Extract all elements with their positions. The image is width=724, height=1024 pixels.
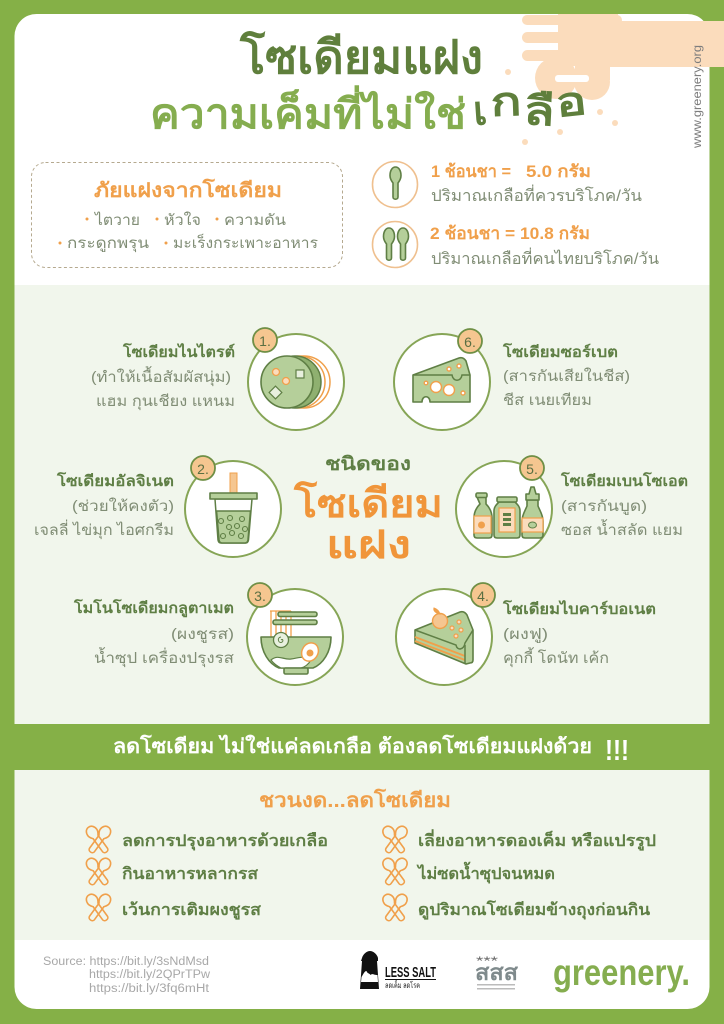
icon: crossed spoons row 1 right <box>381 824 409 855</box>
logo: greenery: greenery. <box>553 952 690 993</box>
item 5: sodium benzoate text: ซอส น้ำสลัด แยม <box>561 519 683 539</box>
item 6: cheese icon <box>394 329 490 430</box>
item 1: sodium nitrite text: แฮม กุนเชียง แหนม <box>96 393 235 411</box>
tips list right <box>416 829 656 921</box>
tips list left <box>122 832 328 921</box>
text: one teaspoon recommended: 1 ช้อนชา = <box>431 162 511 181</box>
icon: hand sprinkling salt <box>505 14 724 145</box>
tips list right: เลี่ยงอาหารดองเค็ม หรือแปรรูป <box>418 829 656 852</box>
center heading: types of hidden sodium: โซเดียม <box>293 481 443 526</box>
item 6: sodium sorbate text: โซเดียมซอร์เบต <box>502 342 618 361</box>
item 2: sodium alginate text: เจลลี่ ไข่มุก ไอศกรีม <box>34 519 174 540</box>
item 1: sodium nitrite text: (ทำให้เนื้อสัมผัสนุ่ม) <box>91 366 231 387</box>
panel: dangers of hidden sodium <box>32 162 342 268</box>
text: one teaspoon recommended: 5.0 กรัม <box>526 162 591 181</box>
icon: two teaspoons <box>372 222 418 268</box>
item 5: sauce bottles icon <box>456 456 552 557</box>
icon: one teaspoon <box>372 162 418 208</box>
item 3: MSG text: น้ำซุป เครื่องปรุงรส <box>94 647 234 668</box>
panel: types of hidden sodium <box>14 285 710 724</box>
website url: www.greenery.org <box>690 45 704 149</box>
icon: crossed spoons row 2 right <box>381 856 409 887</box>
item 3: MSG text: โมโนโซเดียมกลูตาเมต <box>73 598 234 618</box>
word: salt, wobbling letters: ก <box>490 80 522 125</box>
tips list left: กินอาหารหลากรส <box>122 865 258 883</box>
panel: dangers of hidden sodium: หัวใจ <box>164 211 201 229</box>
item 6: sodium sorbate text: ชีส เนยเทียม <box>503 392 592 409</box>
item 5: sodium benzoate text: (สารกันบูด) <box>561 498 647 515</box>
item 3: noodle bowl icon <box>247 583 343 685</box>
badge 1: 1. <box>259 333 271 349</box>
panel: dangers of hidden sodium: มะเร็งกระเพาะอาหาร <box>173 233 318 252</box>
text: one teaspoon recommended: ปริมาณเกลือที่ควรบริโภค/วัน <box>431 184 642 205</box>
item 3: MSG text: (ผงชูรส) <box>171 626 234 643</box>
panel: dangers of hidden sodium: ภัยแฝงจากโซเดียม <box>94 178 282 202</box>
word: salt, wobbling letters: อ <box>553 79 589 126</box>
item 2: sodium alginate text <box>34 471 174 540</box>
item 5: sodium benzoate text <box>560 471 688 539</box>
title: โซเดียมแฝง <box>239 30 483 83</box>
icon: crossed spoons row 3 right <box>381 892 409 923</box>
item 1: sodium nitrite text: โซเดียมไนไตรต์ <box>122 342 235 361</box>
banner background <box>0 724 724 770</box>
logo: less salt: LESS SALT <box>385 964 436 981</box>
banner message: ลดโซเดียม ไม่ใช่แค่ลดเกลือ ต้องลดโซเดียมแฝงด้วย <box>113 734 592 758</box>
source links: https://bit.ly/3fq6mHt <box>89 983 210 995</box>
item 4: sodium bicarbonate text <box>502 599 656 668</box>
item 3: MSG text <box>73 598 234 668</box>
logo: thaihealth <box>475 954 519 990</box>
tips list left: ลดการปรุงอาหารด้วยเกลือ <box>122 832 328 851</box>
logo: thaihealth: *** <box>476 954 499 968</box>
word: salt, wobbling letters: เ <box>472 89 489 134</box>
item 4: sodium bicarbonate text: คุกกี้ โดนัท เค้ก <box>503 647 609 668</box>
tips list left: เว้นการเติมผงชูรส <box>122 901 261 921</box>
panel: dangers of hidden sodium: กระดูกพรุน <box>67 235 149 253</box>
icon: crossed spoons row 1 left <box>84 824 113 855</box>
source links: https://bit.ly/2QPrTPw <box>89 969 211 981</box>
text: one teaspoon recommended <box>431 162 642 205</box>
title: ความเค็มที่ไม่ใช่ <box>150 85 466 137</box>
badge 3: 3. <box>254 588 266 604</box>
text: two teaspoons consumed: ปริมาณเกลือที่คนไทยบริโภค/วัน <box>431 247 659 268</box>
title <box>150 30 589 137</box>
item 4: sodium bicarbonate text: (ผงฟู) <box>503 626 548 643</box>
banner message: !!! <box>605 735 629 767</box>
logo: less salt <box>360 951 436 990</box>
item 6: sodium sorbate text: (สารกันเสียในชีส) <box>503 367 630 385</box>
tips list right: ไม่ซดน้ำซุปจนหมด <box>416 861 555 884</box>
banner message <box>113 734 629 767</box>
item 4: sodium bicarbonate text: โซเดียมไบคาร์บอเนต <box>502 599 656 618</box>
text: two teaspoons consumed: 2 ช้อนชา = 10.8 กรัม <box>430 224 590 243</box>
panel: reduce sodium tips <box>14 770 710 940</box>
item 1: sodium nitrite text <box>91 342 235 411</box>
panel: dangers of hidden sodium: ไตวาย <box>94 211 140 229</box>
item 6: sodium sorbate text <box>502 342 630 409</box>
text: two teaspoons consumed <box>430 224 659 268</box>
center heading: types of hidden sodium: แฝง <box>326 524 411 567</box>
icon: crossed spoons row 2 left <box>84 856 113 887</box>
item 4: cake icon <box>396 583 495 685</box>
center heading: types of hidden sodium: ชนิดของ <box>325 454 411 475</box>
badge 2: 2. <box>197 461 209 477</box>
badge 4: 4. <box>477 588 489 604</box>
tips heading: ชวนงด...ลดโซเดียม <box>259 788 451 812</box>
item 1: ham icon <box>248 328 344 430</box>
center heading: types of hidden sodium <box>293 454 443 567</box>
word: salt, wobbling letters <box>472 79 589 135</box>
panel: dangers of hidden sodium: ความดัน <box>224 212 286 229</box>
source links: Source: https://bit.ly/3sNdMsd <box>43 956 209 968</box>
word: salt, wobbling letters: ลื <box>523 89 556 135</box>
badge 5: 5. <box>526 461 538 477</box>
logo: less salt: ลดเค็ม ลดโรค <box>385 980 420 990</box>
item 2: sodium alginate text: (ช่วยให้คงตัว) <box>72 497 174 515</box>
icon: crossed spoons row 3 left <box>84 892 113 923</box>
item 5: sodium benzoate text: โซเดียมเบนโซเอต <box>560 471 688 490</box>
item 2: bubble tea icon <box>185 456 281 557</box>
logo: thaihealth: สสส <box>475 960 519 985</box>
tips list right: ดูปริมาณโซเดียมข้างถุงก่อนกิน <box>418 899 650 921</box>
source links <box>43 956 211 995</box>
item 2: sodium alginate text: โซเดียมอัลจิเนต <box>56 471 174 490</box>
badge 6: 6. <box>464 334 476 350</box>
